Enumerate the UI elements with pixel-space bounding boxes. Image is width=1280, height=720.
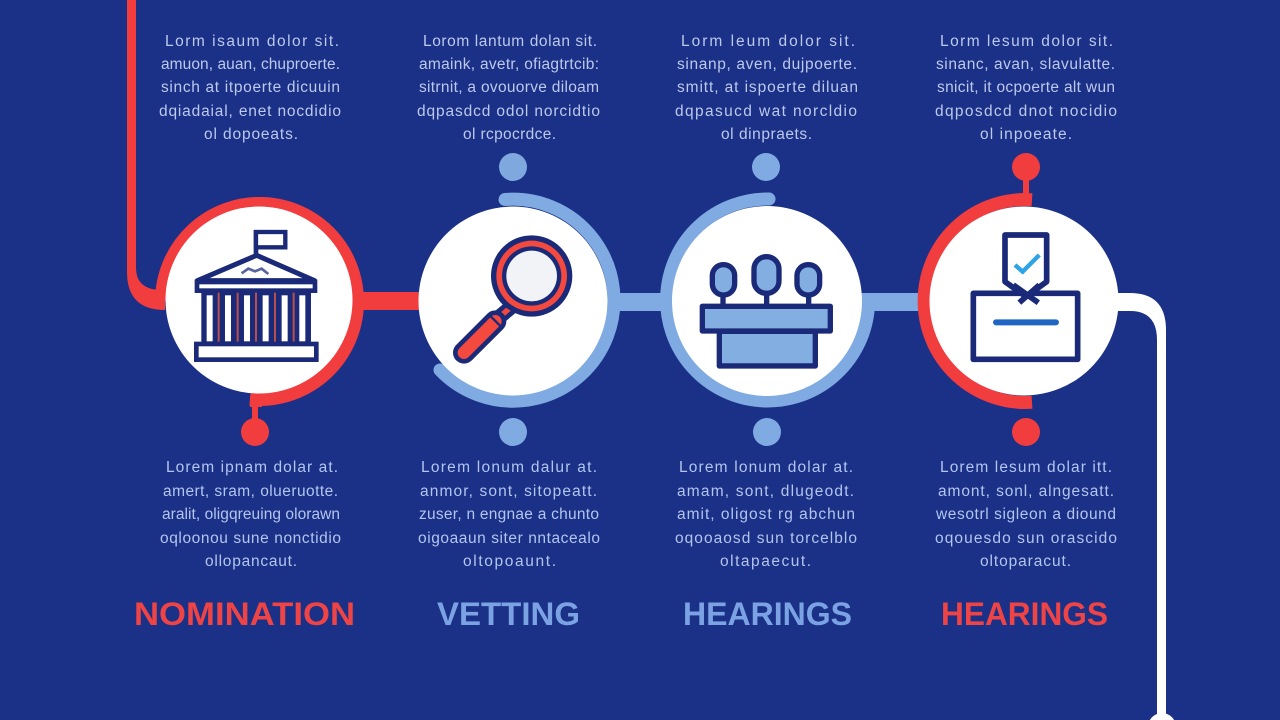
heading: hearings (final): HEARINGS <box>941 596 1108 632</box>
text block: bottom column 1: Lorem ipnam dolar at. <box>166 459 338 476</box>
text block: top column 3: ol dinpraets. <box>721 126 812 143</box>
text block: bottom column 2: anmor, sont, sitopeatt. <box>420 483 597 500</box>
text block: bottom column 3: oltapaecut. <box>720 553 811 570</box>
text block: bottom column 2 <box>418 459 600 570</box>
text block: top column 1: Lorm isaum dolor sit. <box>165 33 339 50</box>
text block: bottom column 2: Lorem lonum dalur at. <box>421 459 597 476</box>
text block: bottom column 2: oltopoaunt. <box>463 553 556 570</box>
icon: ballot and box <box>973 235 1078 359</box>
red line entering from top <box>127 0 165 310</box>
icon: government building with flag <box>196 230 316 360</box>
ring and dots <box>440 153 614 446</box>
text block: top column 1: ol dopoeats. <box>204 126 298 143</box>
connector: hearings to final hearings <box>855 293 925 311</box>
text block: top column 2: Lorom lantum dolan sit. <box>423 33 597 50</box>
text block: top column 3 <box>675 33 858 143</box>
text block: top column 4: sinanc, avan, slavulatte. <box>936 56 1115 73</box>
text block: bottom column 4: wesotrl sigleon a diound <box>935 506 1116 523</box>
ring and dots <box>924 153 1040 446</box>
ring and dots <box>667 153 868 446</box>
ring and stub <box>162 203 357 446</box>
text block: bottom column 1: aralit, oligqreuing olorawn <box>162 506 340 523</box>
text block: top column 3: sinanp, aven, dujpoerte. <box>677 56 857 73</box>
heading: nomination: NOMINATION <box>134 596 355 632</box>
white disc <box>672 206 862 396</box>
white disc <box>930 206 1118 396</box>
white disc <box>166 206 352 394</box>
text block: top column 4: snicit, it ocpoerte alt wun <box>937 79 1115 96</box>
text block: bottom column 1: oqloonou sune nonctidio <box>160 530 341 547</box>
text block: bottom column 1 <box>160 459 341 570</box>
text block: top column 1: dqiadaial, enet nocdidio <box>159 103 341 120</box>
text block: bottom column 2: zuser, n engnae a chunto <box>419 506 599 523</box>
step 4 node: final hearings <box>924 153 1118 446</box>
heading: vetting: VETTING <box>437 596 580 632</box>
text block: top column 2 <box>417 33 600 143</box>
icon: podium with three microphones <box>702 257 830 366</box>
text block: top column 1: amuon, auan, chuproerte. <box>161 56 340 73</box>
text block: top column 2: sitrnit, a ovouorve diloam <box>419 79 599 96</box>
icon: magnifying glass <box>464 235 572 353</box>
text block: bottom column 3: amam, sont, dlugeodt. <box>677 483 854 500</box>
text block: bottom column 4: oqouesdo sun orascido <box>935 530 1117 547</box>
text block: top column 4 <box>935 33 1117 143</box>
text block: top column 3: smitt, at ispoerte diluan <box>677 79 858 96</box>
text block: bottom column 1: amert, sram, olueruotte. <box>163 483 338 500</box>
text block: top column 2: dqpasdcd odol norcidtio <box>417 103 600 120</box>
text block: bottom column 4: amont, sonl, alngesatt. <box>938 483 1114 500</box>
text block: bottom column 4: Lorem lesum dolar itt. <box>940 459 1112 476</box>
text block: bottom column 3: amit, oligost rg abchun <box>677 506 855 523</box>
text block: top column 4: ol inpoeate. <box>980 126 1072 143</box>
text block: bottom column 1: ollopancaut. <box>205 553 297 570</box>
step 2 node: vetting <box>418 153 614 446</box>
text block: top column 3: Lorm leum dolor sit. <box>681 33 855 50</box>
text block: bottom column 4 <box>935 459 1117 570</box>
text block: top column 1: sinch at itpoerte dicuuin <box>161 79 340 96</box>
text block: bottom column 4: oltoparacut. <box>980 553 1071 570</box>
text block: top column 2: ol rcpocrdce. <box>463 126 556 143</box>
text block: top column 2: amaink, avetr, ofiagtrtcib: <box>419 56 599 73</box>
text block: top column 4: dqposdcd dnot nocidio <box>935 103 1117 120</box>
connector: vetting to hearings <box>612 293 667 311</box>
text block: bottom column 2: oigoaaun siter nntacealo <box>418 530 600 547</box>
text block: bottom column 3: Lorem lonum dolar at. <box>679 459 853 476</box>
heading: hearings: HEARINGS <box>683 596 852 632</box>
step 3 node: hearings <box>667 153 868 446</box>
text block: top column 3: dqpasucd wat norcldio <box>675 103 857 120</box>
connector: nomination to vetting <box>355 292 425 310</box>
text block: top column 1 <box>159 33 341 143</box>
white line exiting to bottom <box>1110 293 1176 720</box>
text block: bottom column 3 <box>675 459 857 570</box>
text block: top column 4: Lorm lesum dolor sit. <box>940 33 1113 50</box>
white disc <box>418 206 608 396</box>
step 1 node: nomination <box>162 203 357 446</box>
text block: bottom column 3: oqooaosd sun torcelblo <box>675 530 857 547</box>
